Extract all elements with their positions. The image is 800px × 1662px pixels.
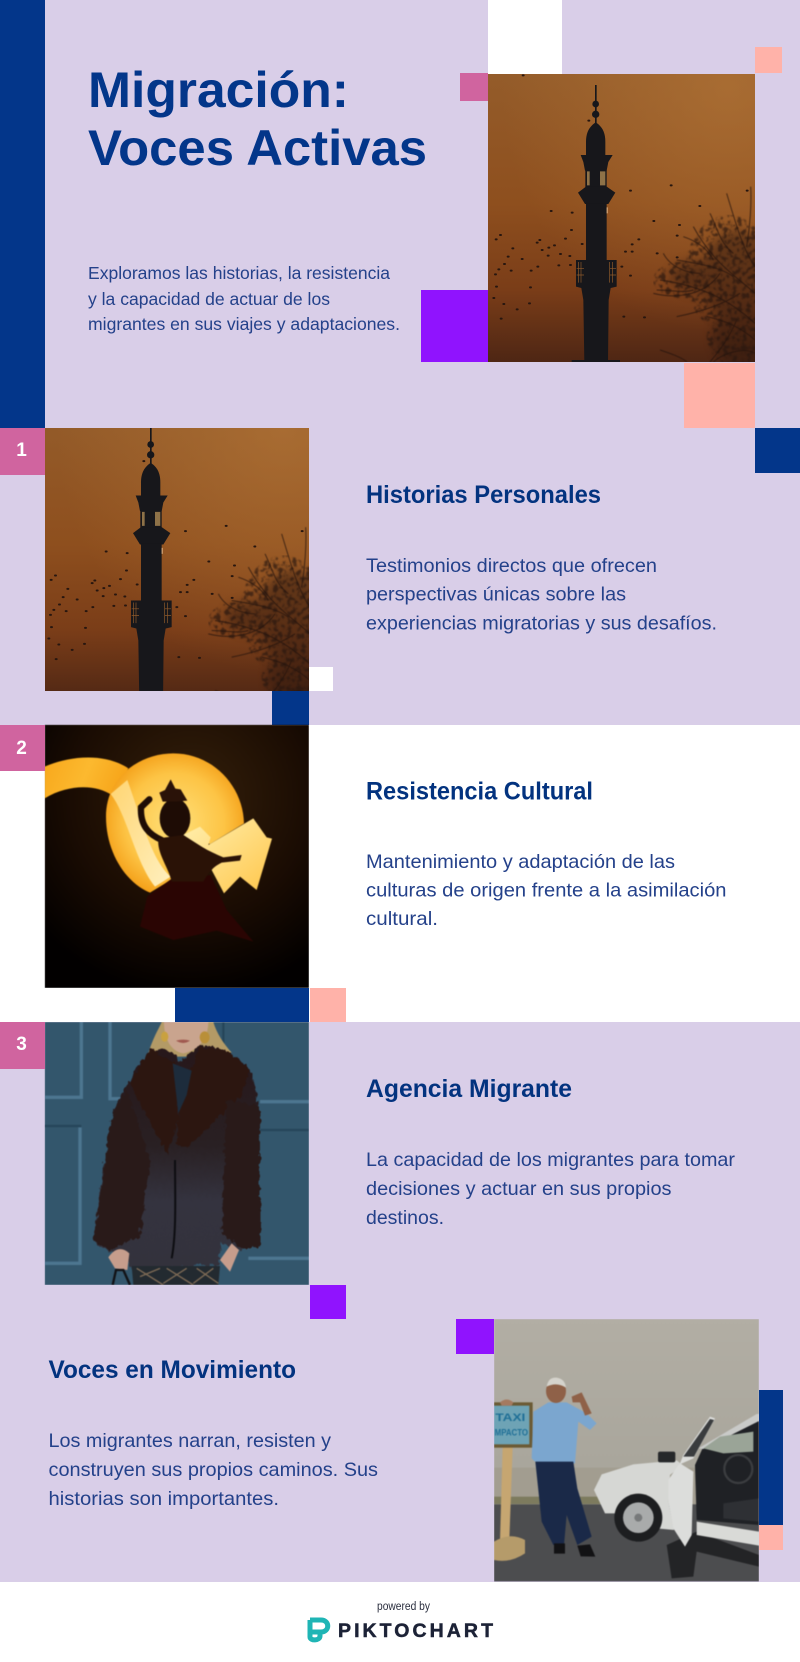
heading: Resistencia Cultural: [366, 778, 593, 806]
body text: Testimonios directos que ofrecen: [366, 555, 657, 577]
man: [500, 1399, 513, 1406]
powered by label: powered by: [377, 1601, 430, 1613]
navy accent: [272, 691, 309, 725]
photo: woman in fur coat: [45, 1022, 309, 1285]
number badge 1: 1: [16, 440, 27, 461]
navy side bar: [0, 0, 45, 428]
heading: Agencia Migrante: [366, 1075, 572, 1103]
peach accent: [759, 1525, 783, 1550]
footer: Piktochart branding: [310, 1601, 493, 1642]
navy corner block: [755, 428, 800, 473]
photo: taxi driver and white car: [494, 1319, 759, 1582]
body text: Los migrantes narran, resisten y: [48, 1430, 331, 1452]
panel: section 2 Resistencia Cultural: [0, 725, 726, 1022]
body text: experiencias migratorias y sus desafíos.: [366, 612, 717, 634]
heading: Historias Personales: [366, 481, 601, 509]
footer background: [0, 1582, 800, 1662]
number badge 3: [0, 1022, 45, 1069]
intro text: migrantes en sus viajes y adaptaciones.: [88, 314, 400, 334]
body text: [48, 1430, 378, 1510]
body text: culturas de origen frente a la asimilación: [366, 880, 726, 902]
number badge 2: 2: [16, 738, 27, 759]
background: white band of section 2: [0, 725, 800, 1022]
panel: header: [0, 0, 782, 428]
body text: perspectivas únicas sobre las: [366, 584, 626, 606]
purple accent: [310, 1285, 346, 1319]
purple accent: [456, 1319, 494, 1354]
wordmark: PIKTOCHART: [338, 1620, 493, 1642]
title: Migración:: [88, 62, 349, 118]
number badge 3: 3: [16, 1034, 27, 1055]
navy accent: [759, 1390, 783, 1525]
purple block: [421, 290, 488, 362]
heading: Voces en Movimiento: [48, 1356, 296, 1384]
large peach block: [684, 363, 755, 428]
body text: [366, 851, 726, 930]
pink block: [460, 73, 488, 101]
body text: [366, 555, 717, 634]
number badge 2: [0, 725, 45, 771]
hero photo: minaret at sunset: [488, 74, 773, 370]
intro text: Exploramos las historias, la resistencia: [88, 263, 390, 283]
photo: minaret: [45, 428, 309, 691]
body text: destinos.: [366, 1207, 444, 1229]
body text: La capacidad de los migrantes para tomar: [366, 1149, 736, 1171]
icon: Piktochart logo: [310, 1620, 328, 1640]
body text: [366, 1149, 736, 1229]
navy accent: [175, 988, 309, 1022]
title: Voces Activas: [88, 120, 427, 176]
white accent: [309, 667, 333, 691]
intro text: y la capacidad de actuar de los: [88, 289, 330, 309]
photo: taxi driver and white car: MPACTO: [495, 1428, 528, 1438]
small peach block: [755, 47, 782, 73]
panel: section 3 Agencia Migrante: [0, 1022, 736, 1319]
panel: section 1 Historias Personales: [0, 414, 800, 725]
peach accent: [310, 988, 346, 1022]
photo: dancer with light trails: [45, 725, 309, 988]
body text: cultural.: [366, 908, 438, 930]
body text: construyen sus propios caminos. Sus: [48, 1459, 378, 1481]
panel: conclusion Voces en Movimiento: [48, 1319, 783, 1582]
body text: historias son importantes.: [48, 1488, 279, 1510]
white block above photo: [488, 0, 562, 74]
photo: taxi driver and white car: TAXI: [495, 1412, 525, 1424]
intro text: [88, 263, 400, 334]
signpost: [500, 1447, 513, 1540]
body text: Mantenimiento y adaptación de las: [366, 851, 675, 873]
car: [594, 1460, 683, 1530]
body text: decisiones y actuar en sus propios: [366, 1178, 672, 1200]
number badge 1: [0, 428, 45, 475]
